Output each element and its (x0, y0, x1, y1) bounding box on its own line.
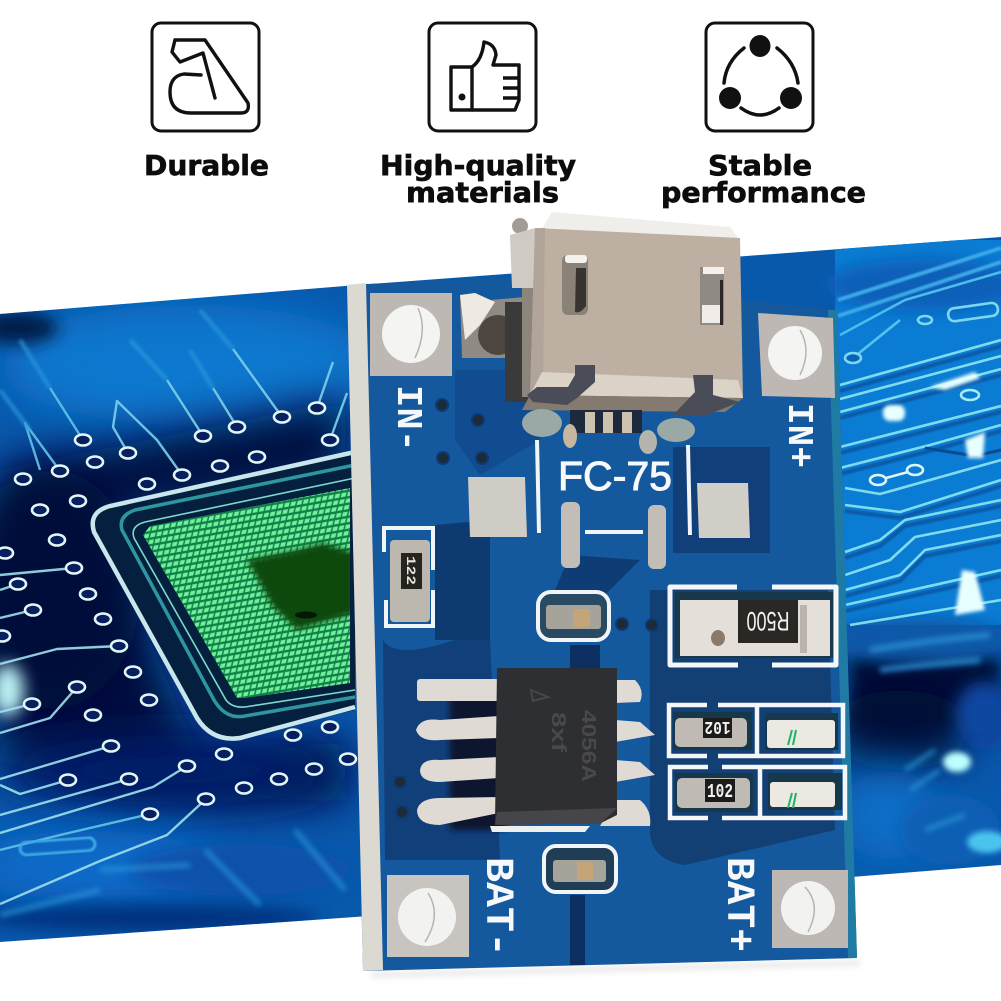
connector clips (527, 365, 740, 415)
silk lines (537, 440, 690, 535)
icon: thumbs up / high quality (429, 23, 536, 131)
solder pads (468, 477, 750, 569)
IC 4056A chip: 8xf (547, 712, 569, 752)
resistor R500 (670, 587, 836, 665)
pad: IN- (370, 293, 452, 376)
solder tab (460, 293, 530, 402)
IC 4056A chip: 4056A (577, 710, 599, 782)
micro USB connector (510, 212, 743, 454)
resistor 102 and LED upper (669, 705, 843, 756)
board shadow (370, 960, 860, 978)
connector slots (562, 255, 724, 325)
vias (394, 399, 658, 818)
white edge strip (347, 283, 383, 971)
left background glow areas (0, 305, 380, 932)
darker copper zones (383, 370, 835, 965)
right bright highlights (883, 372, 985, 615)
caption: performance: performance (661, 176, 866, 209)
board body (347, 277, 857, 971)
panel: FC-75 charger board (347, 212, 860, 978)
resistor 102 and LED lower (670, 767, 845, 818)
IC pins (416, 679, 655, 826)
left circuit traces (0, 310, 347, 915)
board silk labels (387, 385, 819, 957)
resistor 102 and LED lower: 102 (707, 781, 733, 803)
right board edge (828, 310, 857, 958)
chip with green grid (93, 452, 355, 739)
resistor 122: 122 (403, 556, 418, 585)
board silk labels: IN+ (778, 403, 819, 468)
board silk labels: BAT- (474, 857, 519, 957)
connector pins (522, 409, 695, 454)
pad: BAT+ (772, 870, 848, 948)
IC 4056A chip (490, 668, 617, 832)
right circuit traces (838, 248, 1001, 625)
left circuit vias (0, 402, 356, 820)
caption: materials: materials (406, 176, 559, 209)
icon: hammer / durable (152, 23, 259, 131)
capacitor bottom (544, 846, 616, 892)
caption: High-quality: High-quality (380, 149, 576, 182)
board silk labels: BAT+ (715, 857, 760, 952)
capacitor top (538, 592, 609, 640)
pad: IN+ (758, 313, 835, 398)
board silk labels: FC-75 (558, 453, 672, 499)
icon: three connected dots / stable (706, 23, 813, 131)
IC pin shadow (450, 690, 505, 830)
resistor 122 (384, 528, 433, 626)
resistor 102 and LED upper: 102 (704, 716, 730, 736)
caption: Durable: Durable (144, 149, 269, 182)
right background glow areas (825, 240, 1001, 865)
panel: circuit board photo band (0, 230, 1001, 950)
resistor R500: R500 (746, 606, 790, 636)
board silk labels: IN- (387, 385, 428, 452)
pad: BAT- (387, 875, 469, 957)
caption: Stable: Stable (708, 149, 812, 182)
